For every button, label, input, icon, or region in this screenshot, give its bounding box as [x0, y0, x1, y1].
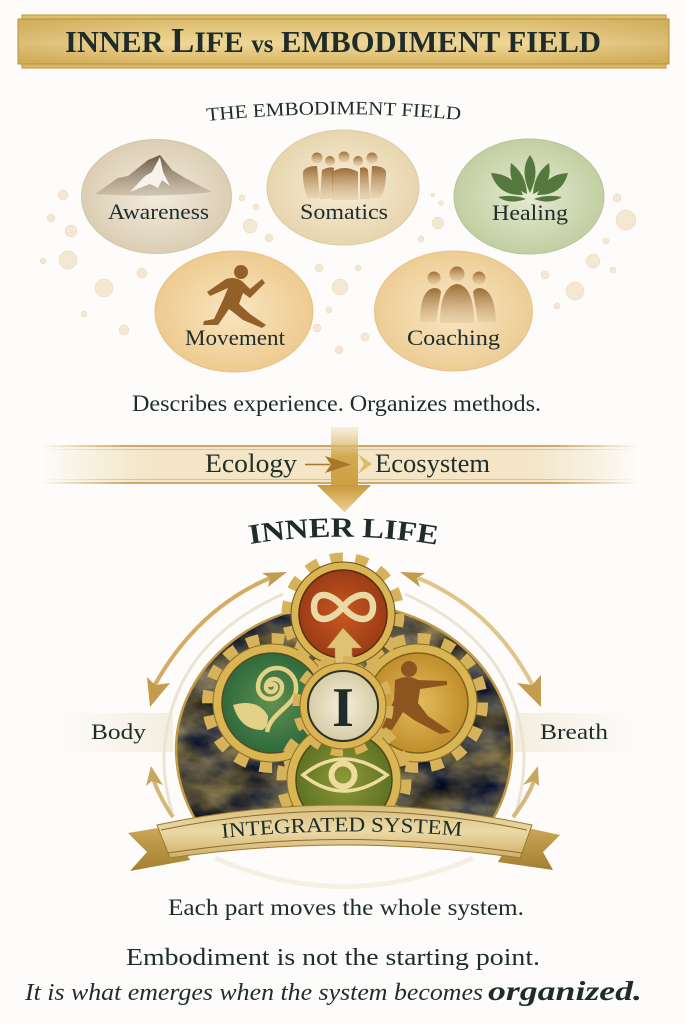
ribbon: integrated system [128, 804, 560, 871]
icon: lotus [491, 155, 568, 202]
closing line two: It is what emerges when the system becomes [24, 979, 483, 1006]
side label: body: Body [91, 719, 146, 744]
field circle: awareness: Awareness [108, 199, 209, 224]
gear: spiral and leaf [208, 639, 336, 767]
field circle: healing [454, 139, 604, 254]
icon: spiral [258, 668, 296, 732]
field circle: awareness [82, 140, 232, 254]
icon: tai chi figure [382, 661, 451, 734]
side label: breath [515, 713, 640, 752]
field circle: healing: Healing [492, 200, 568, 225]
icon: mountain [95, 155, 212, 196]
integrated system diagram [128, 552, 560, 871]
label: ecosystem: Ecosystem [375, 449, 490, 478]
icon: leaf [233, 703, 268, 730]
arrow: upward from core [327, 628, 362, 672]
arrow: lower left [146, 766, 173, 817]
heading: the embodiment field: THE EMBODIMENT FIELD [206, 102, 460, 121]
ecology to ecosystem band [40, 427, 640, 512]
arrow: ecology to ecosystem [305, 454, 372, 474]
side label: body [55, 713, 173, 752]
decorative bubbles [40, 190, 636, 354]
caption: each part: Each part moves the whole system. [168, 895, 524, 921]
field description: Describes experience. Organizes methods. [132, 391, 541, 417]
ribbon tail left [128, 826, 190, 871]
arrow: upper right loop [400, 572, 541, 707]
gear: infinity [287, 558, 399, 670]
icon: three people [420, 266, 496, 323]
field circle: coaching: Coaching [407, 325, 500, 350]
arrow: down to inner life [317, 427, 371, 512]
ribbon: integrated system: INTEGRATED SYSTEM [222, 818, 462, 838]
faint ring around dome [164, 594, 524, 886]
title banner [18, 15, 669, 68]
heading: inner life: INNER LIFE [248, 518, 437, 544]
emphasis: organized: organized. [488, 976, 642, 1006]
field circle: somatics [267, 130, 419, 245]
icon: eye [303, 759, 387, 791]
ribbon tail right [498, 826, 560, 870]
field circle: movement [155, 251, 313, 372]
gear: eye [276, 727, 412, 807]
side label: breath: Breath [540, 719, 608, 744]
icon: running figure [203, 265, 266, 328]
gear: core letter I: I [332, 677, 354, 739]
icon: group of people [303, 152, 386, 200]
gear: movement figure [354, 639, 482, 767]
arrow: upper left loop [147, 572, 287, 707]
dome background [176, 600, 512, 825]
icon: infinity [314, 595, 373, 619]
closing line two [24, 976, 642, 1006]
label: ecology: Ecology [205, 449, 297, 478]
closing line one: Embodiment is not the starting point. [126, 944, 540, 971]
arrow: lower right [513, 766, 539, 817]
gear: core letter I [297, 660, 389, 752]
field circle: coaching [374, 251, 532, 371]
field circle: somatics: Somatics [300, 199, 388, 224]
field circle: movement: Movement [185, 325, 285, 350]
title banner: INNER LIFE vs EMBODIMENT FIELD [65, 21, 601, 60]
